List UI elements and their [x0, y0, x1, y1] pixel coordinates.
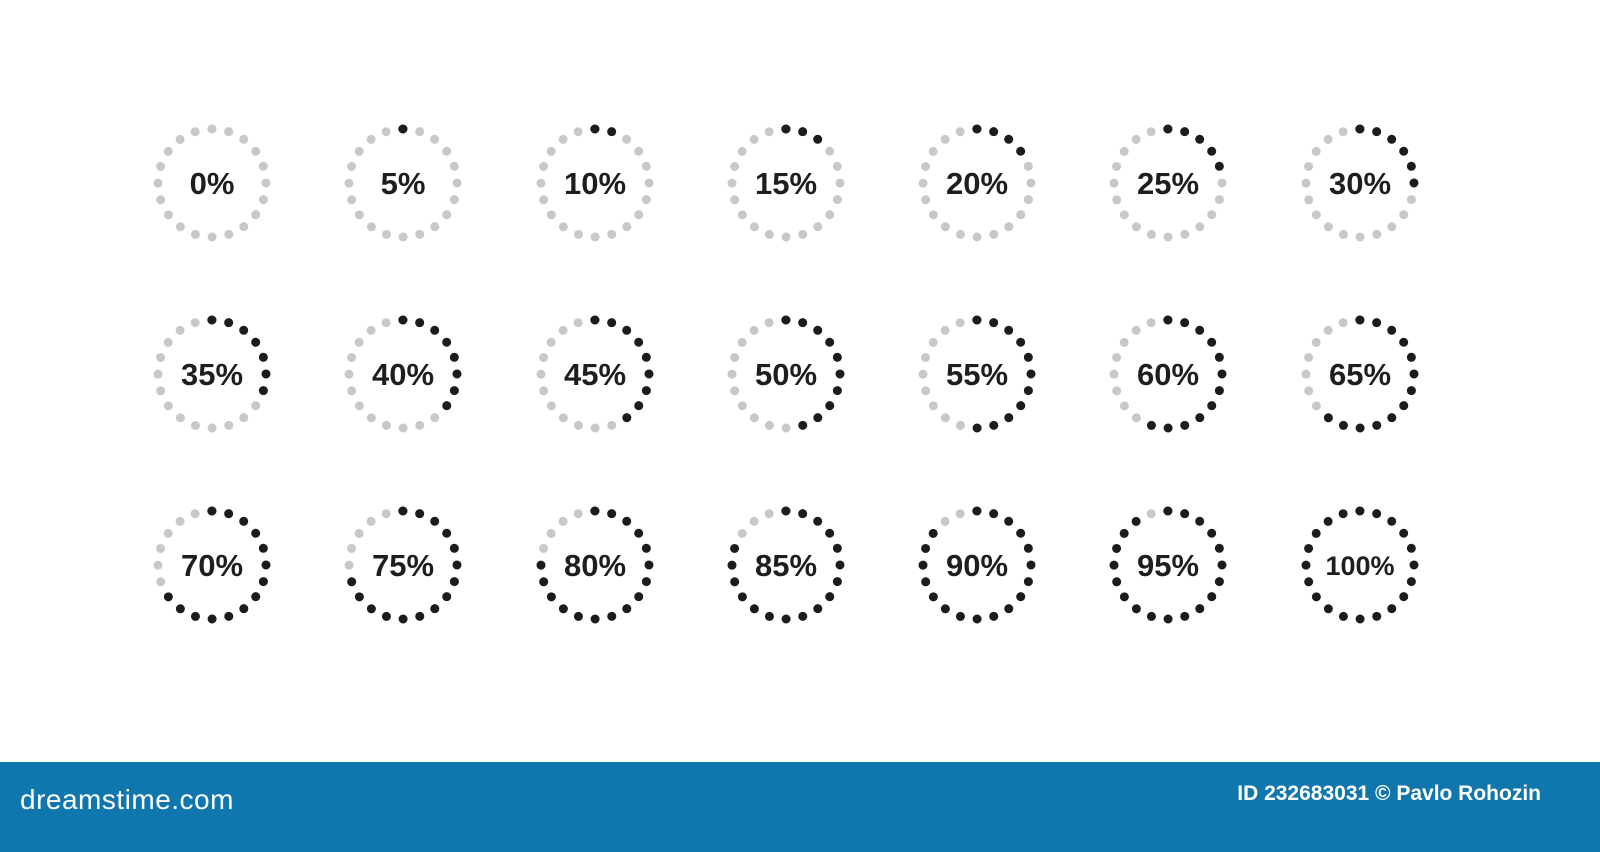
- gauge 70%: 70%: [181, 548, 243, 583]
- footer bar: [0, 762, 1600, 852]
- gauge 45%: [541, 320, 649, 428]
- gauge 15%: 15%: [755, 166, 817, 201]
- gauge 50%: [732, 320, 840, 428]
- logo text: dreamstime.com: [20, 784, 234, 815]
- gauge 10%: 10%: [564, 166, 626, 201]
- gauge 0%: [158, 129, 266, 237]
- gauge 95%: 95%: [1137, 548, 1199, 583]
- gauge 35%: 35%: [181, 357, 243, 392]
- gauge 40%: [349, 320, 457, 428]
- gauge 55%: [923, 320, 1031, 428]
- gauge 15%: [732, 129, 840, 237]
- gauge 25%: [1114, 129, 1222, 237]
- gauge 20%: 20%: [946, 166, 1008, 201]
- gauge 80%: 80%: [564, 548, 626, 583]
- gauge 30%: 30%: [1329, 166, 1391, 201]
- gauge 70%: [158, 511, 266, 619]
- gauge 60%: 60%: [1137, 357, 1199, 392]
- gauge 95%: [1114, 511, 1222, 619]
- credit text: ID 232683031 © Pavlo Rohozin: [1237, 782, 1541, 805]
- gauge 30%: [1306, 129, 1414, 237]
- gauge 5%: [349, 129, 457, 237]
- gauge 65%: [1306, 320, 1414, 428]
- gauge 40%: 40%: [372, 357, 434, 392]
- gauge 75%: [349, 511, 457, 619]
- gauge 85%: 85%: [755, 548, 817, 583]
- gauge 10%: [541, 129, 649, 237]
- gauge 50%: 50%: [755, 357, 817, 392]
- gauge 80%: [541, 511, 649, 619]
- gauge 45%: 45%: [564, 357, 626, 392]
- gauge 35%: [158, 320, 266, 428]
- gauge 20%: [923, 129, 1031, 237]
- gauge 100%: 100%: [1325, 551, 1395, 581]
- gauge 75%: 75%: [372, 548, 434, 583]
- gauge 65%: 65%: [1329, 357, 1391, 392]
- gauge 85%: [732, 511, 840, 619]
- gauge 25%: 25%: [1137, 166, 1199, 201]
- gauge 90%: 90%: [946, 548, 1008, 583]
- gauge 55%: 55%: [946, 357, 1008, 392]
- gauge 5%: 5%: [381, 166, 425, 201]
- gauge 60%: [1114, 320, 1222, 428]
- gauge 0%: 0%: [190, 166, 234, 201]
- gauge 100%: [1306, 511, 1414, 619]
- gauge 90%: [923, 511, 1031, 619]
